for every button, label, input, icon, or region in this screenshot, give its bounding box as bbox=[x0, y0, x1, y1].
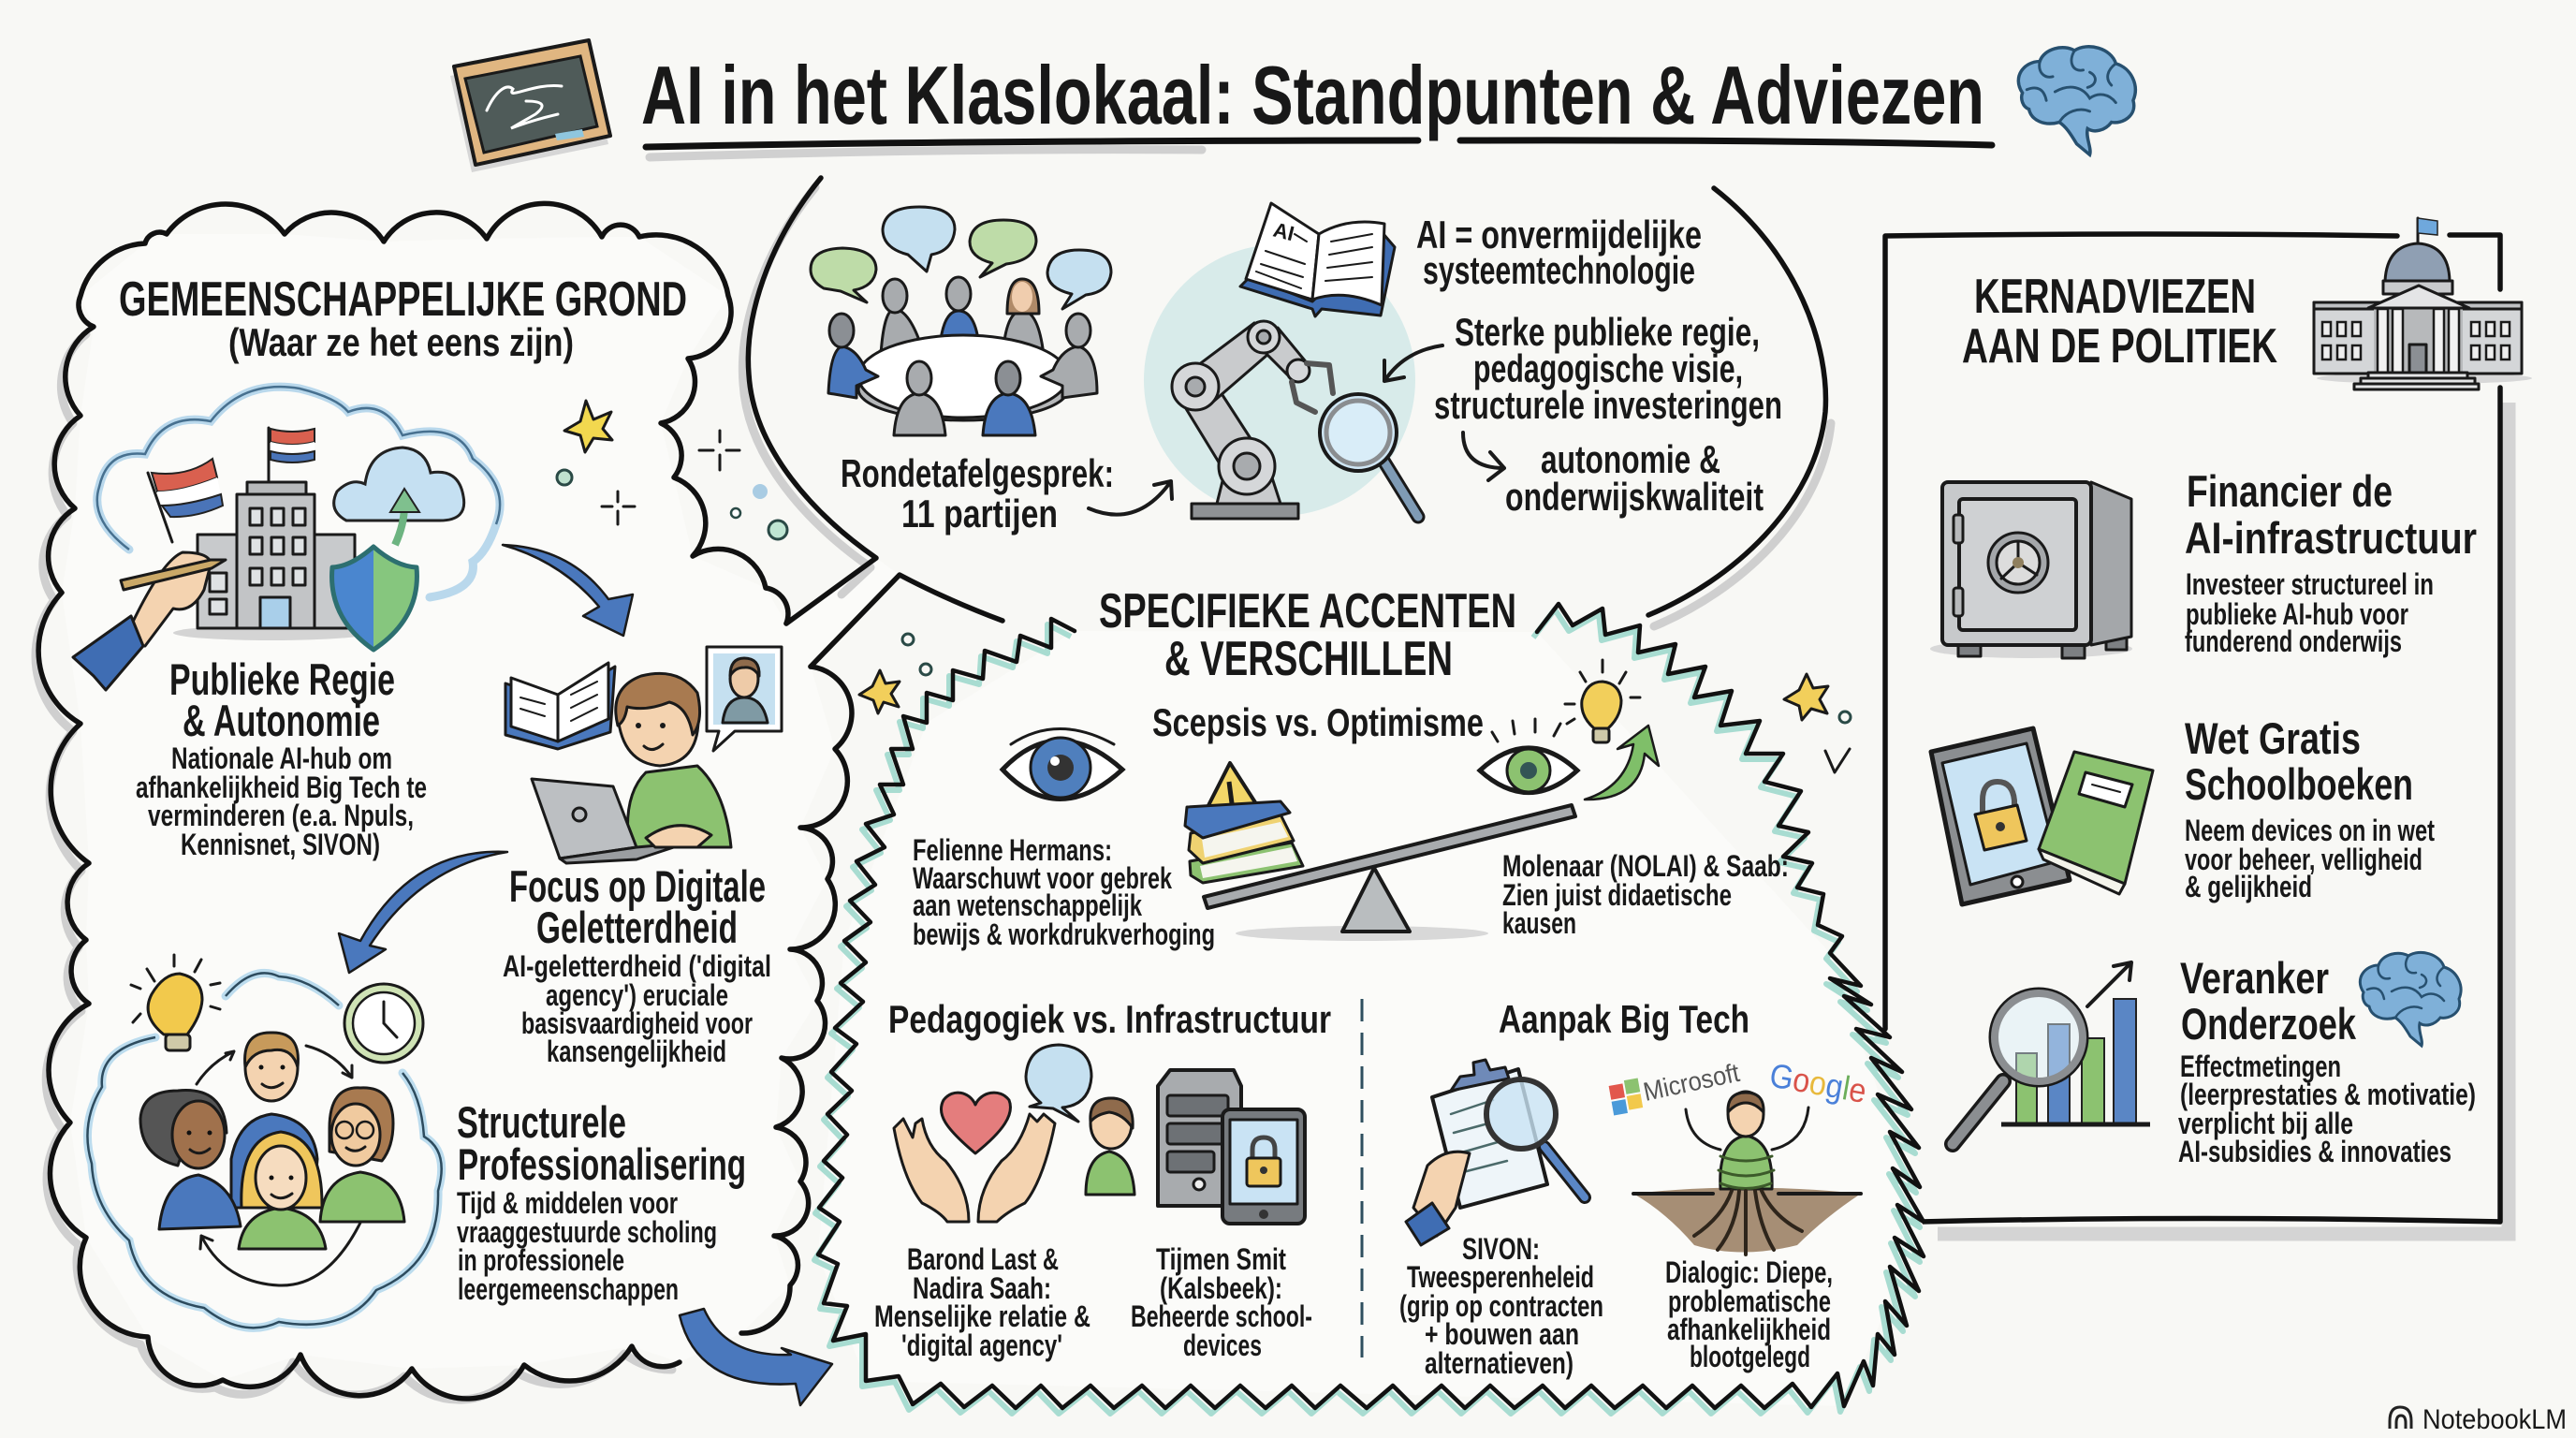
text: barond last en nadira saah: Barond Last & bbox=[907, 1242, 1059, 1276]
text: digitale geletterdheid: kansengelijkheid bbox=[547, 1034, 726, 1068]
text: tijmen smit: (Kalsbeek): bbox=[1160, 1271, 1282, 1305]
text: dialogic: Dialogic: Diepe, bbox=[1665, 1255, 1833, 1289]
icon: optimistic eye with bulb and arrow bbox=[1480, 660, 1659, 800]
advice text: voor beheer, velligheid bbox=[2185, 843, 2422, 876]
text: publieke regie: Kennisnet, SIVON) bbox=[181, 828, 380, 861]
advice text: Investeer structureel in bbox=[2186, 567, 2434, 601]
icon: sceptical eye bbox=[1003, 728, 1122, 800]
icon: robot arm with book and magnifier: AI bbox=[1271, 218, 1296, 245]
text: professionalisering: in professionele bbox=[458, 1243, 624, 1277]
icon: round table discussion bbox=[811, 207, 1111, 435]
advice text: Veranker bbox=[2180, 953, 2329, 1003]
text: sivon: + bouwen aan bbox=[1425, 1317, 1579, 1351]
text: sivon: Tweesperenheleid bbox=[1407, 1260, 1594, 1294]
text: publieke regie bbox=[136, 654, 427, 861]
text: professionalisering: Tijd & middelen voor bbox=[457, 1186, 678, 1220]
text: felienne hermans: Waarschuwt voor gebrek bbox=[913, 861, 1172, 895]
text: sivon bbox=[1399, 1232, 1603, 1380]
bubble outline bbox=[742, 178, 1831, 667]
title underline bbox=[646, 140, 1992, 157]
text: dialogic bbox=[1665, 1255, 1833, 1373]
heading: & VERSCHILLEN bbox=[1164, 632, 1453, 686]
logo: google: Google bbox=[1767, 1056, 1869, 1110]
text: molenaar en saab: Zien juist didaetische bbox=[1502, 878, 1732, 912]
heading: AAN DE POLITIEK bbox=[1962, 319, 2277, 374]
text: felienne hermans: bewijs & workdrukverhoging bbox=[913, 917, 1215, 951]
text: digitale geletterdheid: AI-geletterdheid ('digital bbox=[503, 949, 771, 983]
text: professionalisering: leergemeenschappen bbox=[458, 1272, 679, 1306]
text: rondetafelgesprek: Rondetafelgesprek: bbox=[841, 451, 1114, 495]
logo: microsoft bbox=[1609, 1058, 1742, 1116]
text: tijmen smit: Beheerde school- bbox=[1131, 1299, 1312, 1333]
title text: AI in het Klaslokaal: Standpunten & Adviezen bbox=[641, 49, 1984, 141]
text: publieke regie: Nationale AI-hub om bbox=[171, 741, 392, 775]
heading bbox=[1099, 584, 1516, 686]
advice text: Financier de bbox=[2187, 466, 2393, 516]
panel: specifieke accenten en verschillen bbox=[814, 584, 1924, 1414]
advice text: AI-infrastructuur bbox=[2185, 513, 2477, 563]
icon: public building with flags, cloud and shield bbox=[73, 387, 500, 690]
text: autonomie en onderwijskwaliteit: onderwijskwaliteit bbox=[1505, 475, 1764, 519]
icon: student with laptop and book bbox=[505, 647, 782, 863]
text: professionalisering: Professionalisering bbox=[458, 1139, 746, 1189]
icon: chalkboard bbox=[450, 40, 610, 172]
text: publieke regie: Publieke Regie bbox=[169, 654, 395, 704]
heading: KERNADVIEZEN bbox=[1974, 270, 2256, 324]
icon: teacher team with bulb and clock bbox=[87, 955, 442, 1328]
arrow: to autonomie bbox=[1463, 433, 1504, 480]
text: sivon: SIVON: bbox=[1462, 1232, 1540, 1266]
text: tijmen smit bbox=[1131, 1242, 1312, 1362]
text: sivon: alternatieven) bbox=[1425, 1346, 1573, 1380]
advice text: Neem devices on in wet bbox=[2185, 814, 2435, 847]
panel: gemeenschappelijke grond bbox=[36, 203, 900, 1400]
advice text: Wet Gratis bbox=[2185, 713, 2361, 763]
advice text: & gelijkheid bbox=[2185, 870, 2312, 903]
icon: clipboard with magnifier and hand bbox=[1406, 1060, 1585, 1245]
text: professionalisering bbox=[457, 1097, 746, 1306]
text: rondetafelgesprek: 11 partijen bbox=[901, 492, 1058, 536]
advice text: Effectmetingen bbox=[2180, 1049, 2341, 1083]
advice text: Schoolboeken bbox=[2185, 759, 2413, 809]
text: autonomie en onderwijskwaliteit: autonomie & bbox=[1541, 437, 1720, 481]
advice text: Onderzoek bbox=[2181, 999, 2357, 1049]
text: systeemtechnologie: systeemtechnologie bbox=[1423, 248, 1695, 292]
text: digitale geletterdheid: agency') eruciale bbox=[546, 978, 728, 1012]
text: publieke regie: afhankelijkheid Big Tech te bbox=[136, 770, 427, 804]
arrow: to robot arm bbox=[1384, 345, 1442, 381]
text: professionalisering: vraaggestuurde scholing bbox=[457, 1215, 717, 1249]
subheading: aanpak big tech: Aanpak Big Tech bbox=[1499, 997, 1749, 1041]
text: barond last en nadira saah: Menselijke relatie & bbox=[874, 1299, 1090, 1333]
text: dialogic: blootgelegd bbox=[1690, 1340, 1810, 1373]
arrow: common ground to accents bbox=[680, 1309, 832, 1405]
text: sivon: (grip op contracten bbox=[1399, 1289, 1603, 1323]
text: molenaar en saab: kausen bbox=[1502, 906, 1576, 940]
panel: kernadviezen bbox=[1885, 218, 2532, 1234]
text: digitale geletterdheid: Geletterdheid bbox=[536, 902, 738, 952]
icon: brain bbox=[2360, 952, 2461, 1046]
text: dialogic: problematische bbox=[1668, 1284, 1831, 1318]
advice text bbox=[2185, 713, 2435, 903]
text: rondetafelgesprek bbox=[841, 451, 1114, 536]
cloud outline bbox=[36, 203, 900, 1400]
icon: brain bbox=[2018, 47, 2135, 154]
advice: veranker onderzoek bbox=[1953, 952, 2476, 1168]
text: publieke regie visie: structurele investeringen bbox=[1434, 383, 1782, 427]
icon: person tied by roots to big tech bbox=[1633, 1092, 1861, 1255]
icon: tablet and book bbox=[1931, 728, 2153, 904]
icon: safe bbox=[1930, 482, 2132, 658]
decorative stars and dots bbox=[557, 401, 787, 539]
text: molenaar en saab: Molenaar (NOLAI) & Saab: bbox=[1502, 849, 1789, 883]
icon: robot arm with book and magnifier bbox=[1144, 203, 1418, 519]
advice: wet gratis schoolboeken bbox=[1931, 713, 2435, 904]
subheading: pedagogiek vs infrastructuur: Pedagogiek vs. Infrastructuur bbox=[888, 997, 1331, 1041]
icon: hands with heart and speech bubble bbox=[894, 1045, 1134, 1222]
text: barond last en nadira saah: Nadira Saah: bbox=[913, 1271, 1051, 1305]
icon: seesaw with books and warning bbox=[1185, 763, 1575, 941]
icon: server and tablet with lock bbox=[1158, 1070, 1305, 1224]
advice text: funderend onderwijs bbox=[2185, 624, 2402, 658]
advice text bbox=[2178, 953, 2476, 1168]
text: digitale geletterdheid: Focus op Digitale bbox=[509, 861, 766, 911]
text: publieke regie visie: Sterke publieke regie, bbox=[1455, 310, 1760, 354]
advice text: AI-subsidies & innovaties bbox=[2178, 1135, 2452, 1168]
icon: parliament building bbox=[2314, 218, 2532, 389]
logo: microsoft: Microsoft bbox=[1641, 1058, 1742, 1107]
text: autonomie en onderwijskwaliteit bbox=[1505, 437, 1764, 519]
arrow: geletterdheid to professionalisering bbox=[339, 852, 507, 973]
text: molenaar en saab bbox=[1502, 849, 1789, 940]
text: barond last en nadira saah bbox=[874, 1242, 1090, 1362]
zigzag outline bbox=[814, 604, 1924, 1414]
arrow: regie to geletterdheid bbox=[503, 545, 633, 636]
text: systeemtechnologie: AI = onvermijdelijke bbox=[1416, 213, 1702, 257]
advice text: publieke AI-hub voor bbox=[2186, 597, 2408, 631]
text: digitale geletterdheid bbox=[503, 861, 771, 1068]
text: professionalisering: Structurele bbox=[457, 1097, 626, 1147]
subheading: (Waar ze het eens zijn) bbox=[228, 320, 574, 364]
text: systeemtechnologie bbox=[1416, 213, 1702, 292]
text: publieke regie: verminderen (e.a. Npuls, bbox=[148, 799, 414, 832]
panel: systeemtechnologie speech bubble bbox=[742, 178, 1831, 667]
text: dialogic: afhankelijkheid bbox=[1667, 1313, 1831, 1346]
text: felienne hermans: Felienne Hermans: bbox=[913, 833, 1112, 867]
text: tijmen smit: devices bbox=[1183, 1328, 1262, 1362]
advice text: verplicht bij alle bbox=[2178, 1107, 2353, 1140]
advice text: (leerprestaties & motivatie) bbox=[2180, 1078, 2476, 1111]
panel frame bbox=[1885, 234, 2509, 1234]
advice text bbox=[2185, 466, 2477, 658]
text: publieke regie visie bbox=[1434, 310, 1782, 427]
text: barond last en nadira saah: 'digital agency' bbox=[901, 1328, 1062, 1362]
heading: SPECIFIEKE ACCENTEN bbox=[1099, 584, 1516, 638]
text: tijmen smit: Tijmen Smit bbox=[1156, 1242, 1286, 1276]
text: felienne hermans bbox=[913, 833, 1215, 951]
subheading: scepsis vs optimisme: Scepsis vs. Optimisme bbox=[1152, 700, 1484, 744]
text: felienne hermans: aan wetenschappelijk bbox=[913, 888, 1142, 922]
text: digitale geletterdheid: basisvaardigheid voor bbox=[521, 1006, 753, 1040]
icon: magnifier over bar chart bbox=[1953, 962, 2150, 1144]
decorative stars and dots bbox=[859, 634, 1851, 772]
arrow: to robot bbox=[1089, 481, 1172, 515]
title bbox=[641, 49, 1992, 157]
heading: GEMEENSCHAPPELIJKE GROND bbox=[119, 272, 687, 327]
heading bbox=[1962, 270, 2277, 374]
advice: financier bbox=[1930, 466, 2477, 658]
text: publieke regie: & Autonomie bbox=[183, 696, 380, 745]
text: publieke regie visie: pedagogische visie, bbox=[1473, 346, 1743, 390]
